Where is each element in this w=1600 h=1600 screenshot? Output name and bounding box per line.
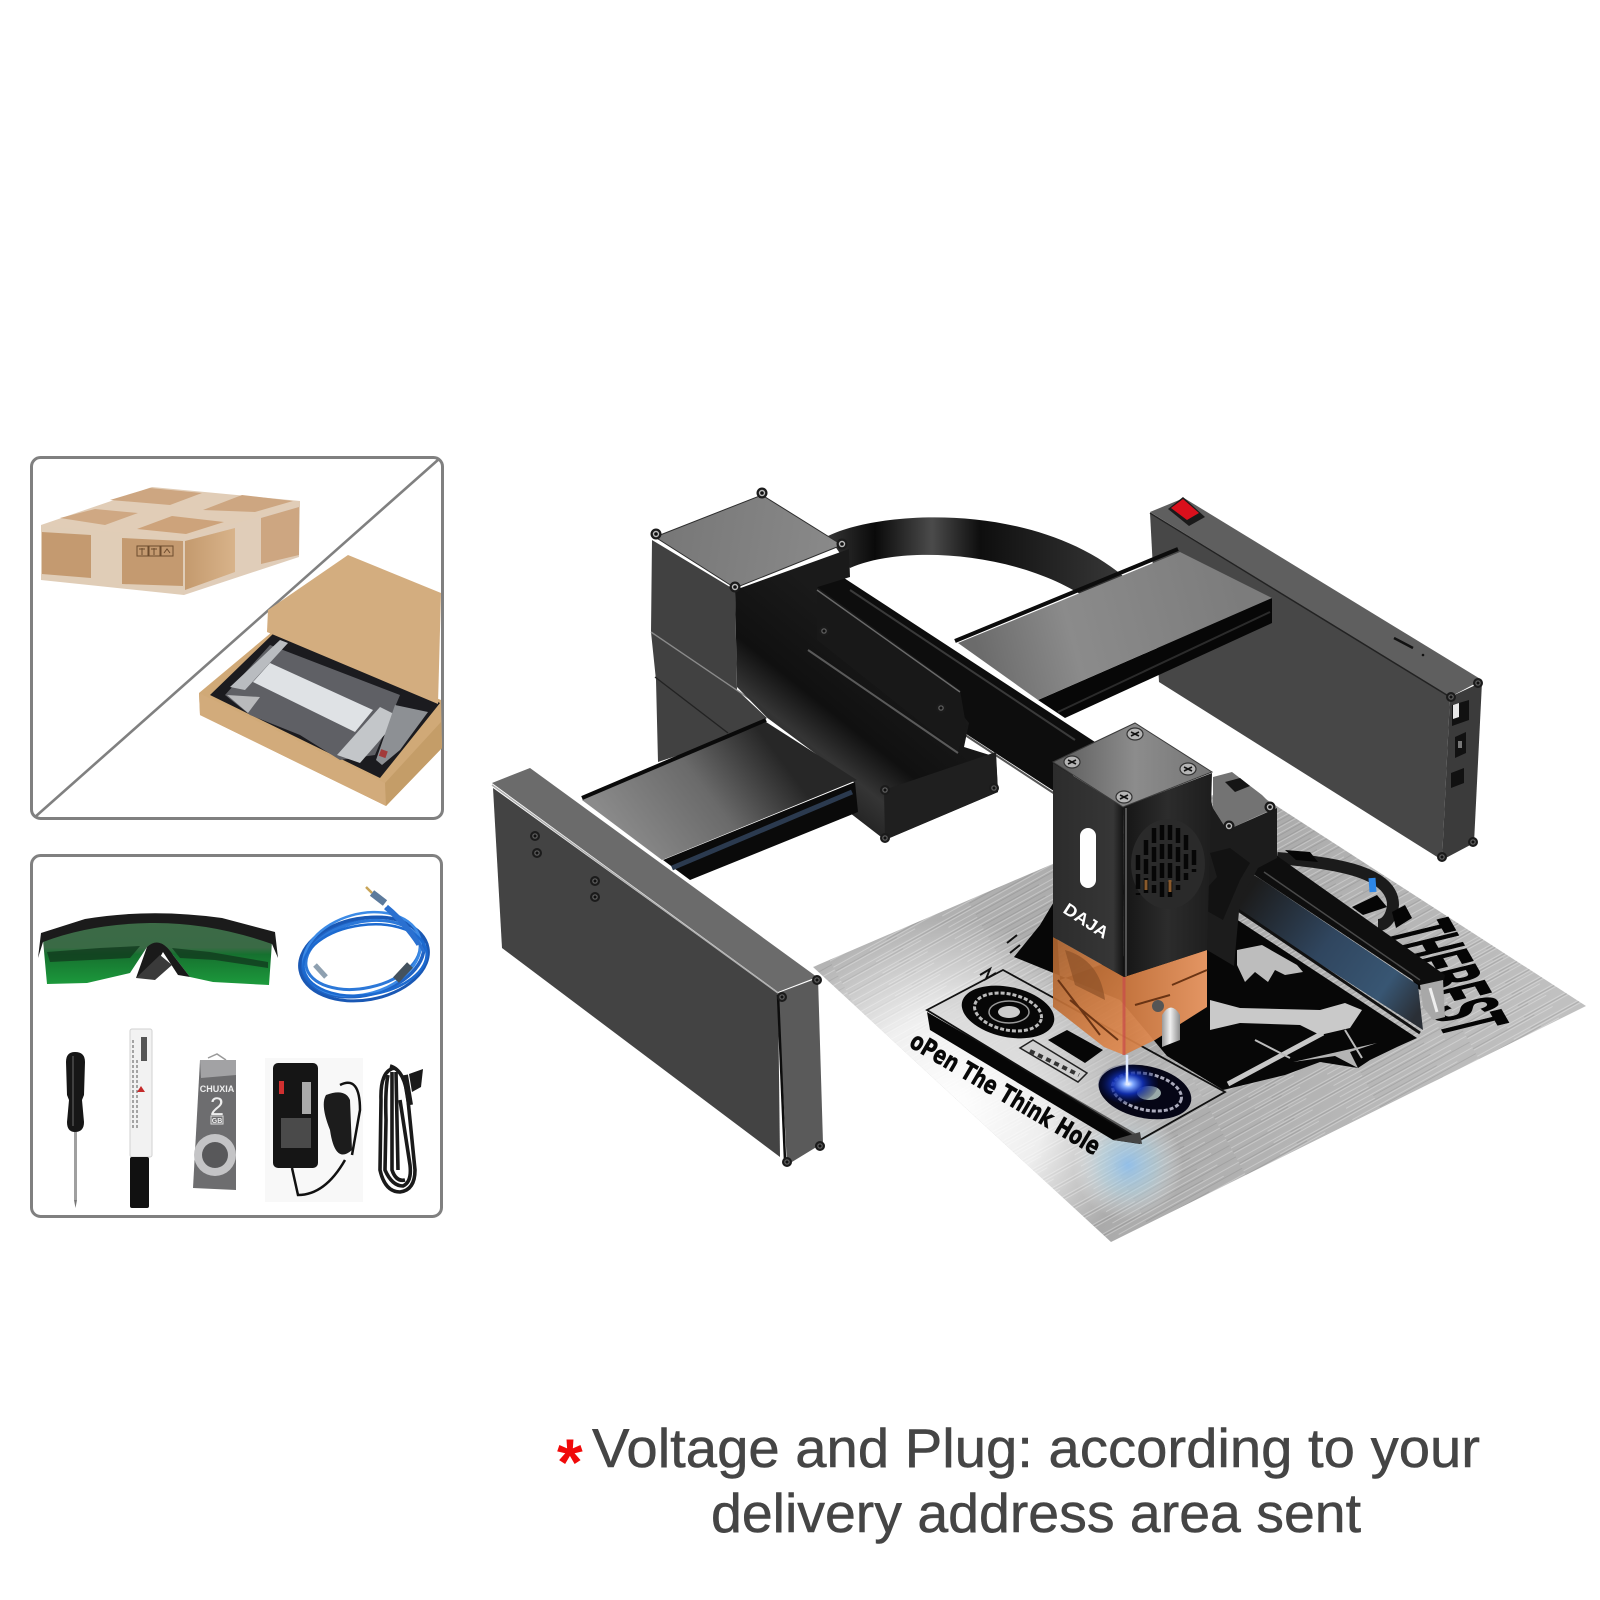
footnote line 2: delivery address area sent <box>711 1482 1361 1544</box>
corner screws <box>777 975 825 1167</box>
icon: power adapter <box>265 1058 363 1202</box>
cassette window <box>1048 1030 1103 1063</box>
footnote line 1: Voltage and Plug: according to your <box>592 1417 1480 1479</box>
left gantry plate and rail <box>582 720 858 880</box>
closed shipping carton <box>41 487 300 595</box>
icon: green safety goggles <box>38 913 278 985</box>
icon: USB flash drive: CHUXIA <box>200 1084 235 1094</box>
left speaker <box>957 978 1059 1046</box>
left tower <box>650 488 999 843</box>
clamp lever <box>1193 848 1250 920</box>
carriage block <box>1193 772 1277 966</box>
orange acrylic shield <box>1053 937 1207 1055</box>
diagonal divider <box>35 459 439 817</box>
right side box with switch and ports <box>1150 497 1483 862</box>
footnote: voltage and plug <box>557 1417 1480 1544</box>
ribbon cable <box>828 517 1130 602</box>
focus knob <box>1152 1000 1180 1047</box>
icon: power cord <box>380 1066 423 1192</box>
icon: USB flash drive: 2 <box>210 1093 224 1121</box>
engraving: reflected ribbon and dark patches <box>1277 850 1412 928</box>
white window slot <box>1080 828 1096 888</box>
engraving: cartoon figure <box>980 900 1417 1090</box>
right speaker with laser spot <box>1094 1057 1196 1127</box>
icon: USB flash drive <box>193 1054 236 1190</box>
panel: packaging boxes <box>32 458 442 818</box>
X axis beam (lower section with blue reflection) <box>1230 845 1445 1033</box>
left end box <box>492 768 825 1167</box>
corner screws <box>1437 678 1483 862</box>
metal sheet with engraving <box>813 783 1586 1242</box>
icon: marker pen <box>130 1029 152 1208</box>
engraved caption: oPen The Think Hole <box>905 1026 1106 1161</box>
ports <box>1451 700 1469 788</box>
carton handling icons <box>137 546 173 556</box>
panel: accessories <box>32 856 442 1216</box>
icon: blue USB cable <box>293 887 435 1011</box>
red asterisk: * <box>557 1425 583 1499</box>
icon: red power switch <box>1168 497 1205 526</box>
open box with machine inside <box>199 555 442 806</box>
right gantry plate and rail <box>955 549 1272 718</box>
icon: USB flash drive: GB <box>212 1118 222 1125</box>
key row <box>1020 1040 1087 1082</box>
laser beam <box>1126 1055 1128 1085</box>
mounting screws <box>530 831 600 902</box>
engraving: boombox <box>927 970 1225 1144</box>
fan grille <box>1131 819 1205 909</box>
top screws <box>1064 728 1196 803</box>
icon: screwdriver <box>66 1052 85 1208</box>
DAJA logo: DAJA <box>1060 899 1112 943</box>
laser module <box>1053 723 1212 1055</box>
bracket screws <box>819 626 999 843</box>
rail end cap <box>1420 980 1445 1020</box>
slot and pinhole <box>1394 638 1424 656</box>
tower top screws <box>650 488 848 592</box>
X axis beam (upper section) <box>817 578 1095 796</box>
